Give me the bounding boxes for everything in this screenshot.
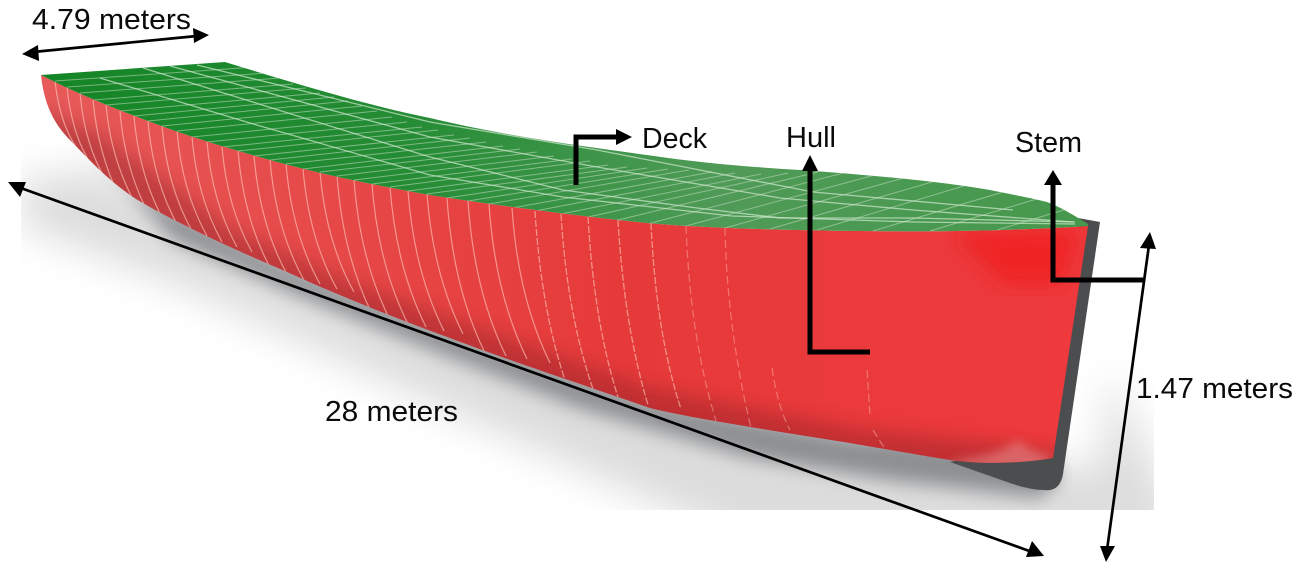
label: stem: Stem bbox=[1015, 127, 1082, 159]
hull bbox=[41, 75, 1088, 463]
dimension arrow: beam 4.79 meters bbox=[22, 28, 209, 61]
deck bbox=[41, 62, 1088, 231]
label: 4.79 meters: 4.79 meters bbox=[32, 4, 191, 36]
deck longitudinal lines bbox=[100, 65, 1075, 224]
ground shadow bbox=[21, 156, 1154, 510]
hull lower shading bbox=[49, 108, 1055, 463]
hull bright bow patch bbox=[955, 230, 1080, 285]
label: 1.47 meters: 1.47 meters bbox=[1136, 373, 1293, 405]
arrow: stem bbox=[1044, 170, 1143, 280]
deck transverse lines bbox=[55, 67, 1087, 231]
dimension arrow: depth 1.47 meters bbox=[1100, 232, 1156, 562]
label: deck: Deck bbox=[642, 123, 707, 155]
label: hull: Hull bbox=[786, 122, 836, 154]
stem bbox=[950, 218, 1100, 490]
bow bottom highlight bbox=[952, 438, 1053, 463]
label: 28 meters: 28 meters bbox=[325, 396, 458, 428]
dimension arrow: length 28 meters bbox=[8, 182, 1044, 557]
hull ribs bbox=[55, 81, 550, 363]
arrow: deck bbox=[576, 129, 632, 185]
arrow: hull bbox=[802, 155, 870, 352]
